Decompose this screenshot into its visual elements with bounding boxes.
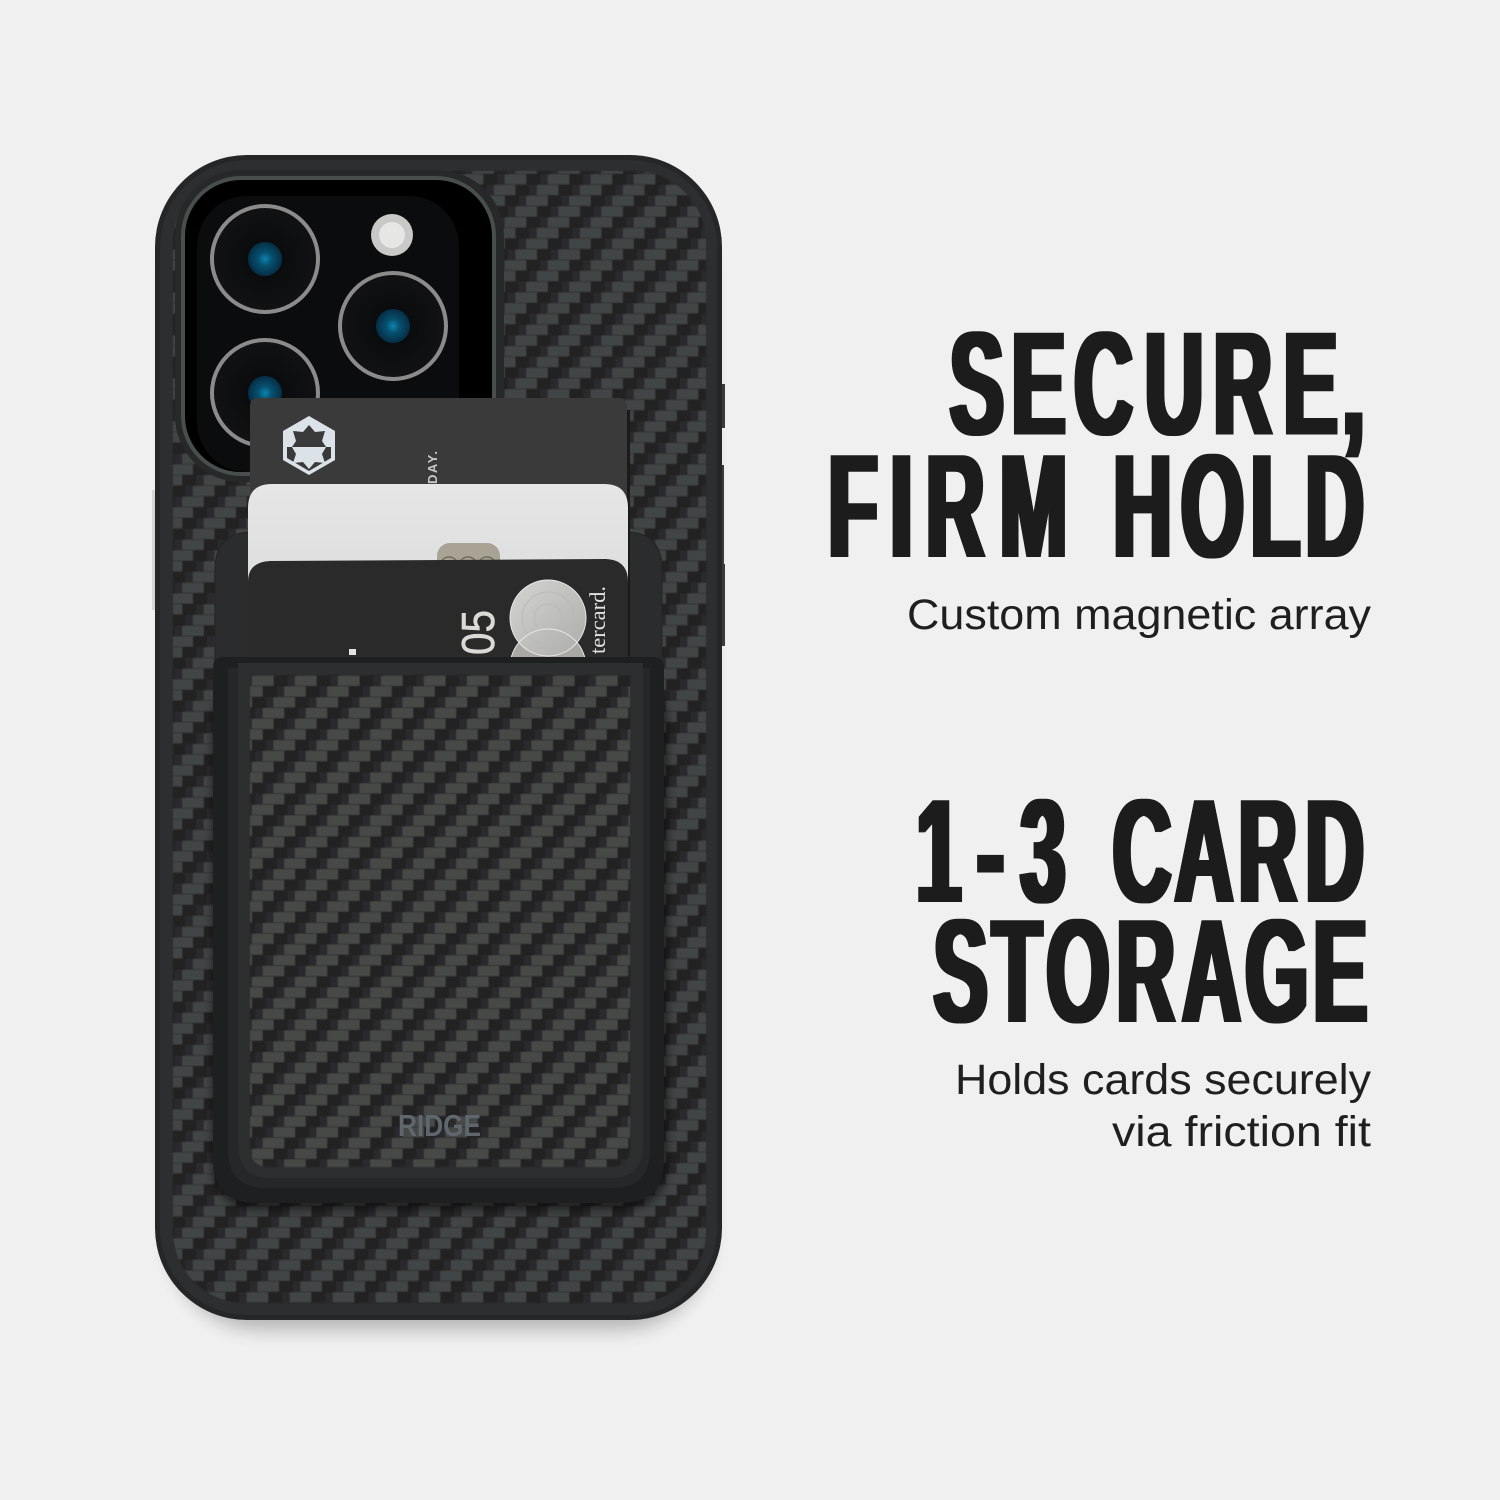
brand mark: RIDGE (398, 1108, 481, 1143)
side buttons (152, 384, 725, 646)
carbon fibre back (173, 171, 706, 1303)
lens top left (212, 206, 318, 312)
subtext: holds cards securely via friction fit: Holds cards securely (955, 1056, 1372, 1104)
card number 05: 05 (452, 610, 504, 655)
heading: 1-3 card storage: 1-3 CARD (916, 769, 1364, 934)
heading: 1-3 card storage (916, 769, 1367, 1054)
subtext: holds cards securely via friction fit: via friction fit (1112, 1108, 1371, 1156)
card: white card (248, 484, 628, 582)
subtext: holds cards securely via friction fit (955, 1056, 1372, 1156)
phone shadow (170, 190, 710, 1330)
heading: secure, firm hold: FIRM HOLD (828, 424, 1364, 589)
camera island outer (175, 170, 504, 482)
mastercard wordmark: tercard. (585, 586, 610, 654)
wallet back panel (215, 532, 662, 660)
mastercard circles (510, 580, 586, 657)
wallet ridge (228, 668, 650, 1188)
case bevel (160, 160, 717, 1315)
card: dark payment card (248, 559, 628, 657)
flash (371, 214, 413, 256)
heading: 1-3 card storage: STORAGE (934, 889, 1367, 1054)
heading: secure, firm hold: SECURE, (950, 302, 1365, 467)
camera plate (197, 196, 459, 472)
lens bottom left (212, 340, 318, 446)
card text: DAY.: DAY. (425, 450, 440, 484)
wallet shadow (212, 680, 668, 1210)
wallet outer rim (213, 657, 664, 1203)
lens right (340, 273, 446, 379)
icon: hexagon star logo (283, 416, 335, 475)
wallet pocket (213, 657, 664, 1203)
wallet carbon fibre (250, 675, 630, 1167)
subtext: custom magnetic array: Custom magnetic array (907, 591, 1372, 639)
camera module (175, 170, 504, 482)
metal frame (183, 178, 494, 474)
heading: secure, firm hold (828, 302, 1365, 589)
chip (437, 543, 500, 560)
case body (155, 155, 722, 1320)
card shadow edge (627, 410, 630, 660)
small mark (349, 649, 356, 655)
wallet face (238, 663, 643, 1178)
card: dark logo card (250, 398, 630, 660)
phone case (152, 155, 725, 1330)
